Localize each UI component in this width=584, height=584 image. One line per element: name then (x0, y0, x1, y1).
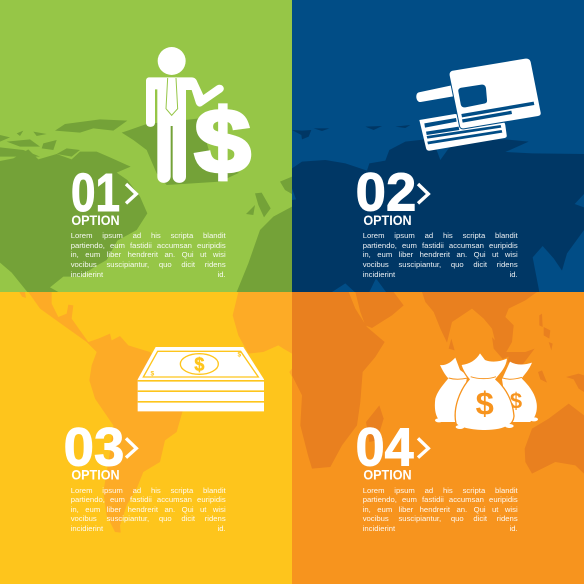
text block 03: incidierint id. (71, 524, 226, 533)
world map: south america (19, 292, 292, 533)
label OPTION: OPTION (71, 466, 120, 482)
icon: stack of banknotes (138, 347, 264, 411)
icon: stack of banknotes: $ (194, 354, 204, 374)
icon: money bags: $ (510, 389, 522, 414)
text block 02: Lorem ipsum ad his scripta blandit (363, 231, 518, 240)
world map: asia (292, 125, 584, 292)
text block 01: in, eum liber hendrerit an. Qui ut wisi (71, 250, 226, 259)
text block 01: vocibus suscipiantur, quo dicit ridens (71, 260, 226, 269)
panel: option 02 (292, 0, 584, 292)
panel: option 04 (292, 292, 584, 584)
text block 03: Lorem ipsum ad his scripta blandit (71, 486, 226, 494)
text block 02 (362, 231, 518, 279)
number 04: 04 (356, 418, 414, 477)
icon: businessman with dollar: $ (195, 92, 251, 193)
text block 04: vocibus suscipiantur, quo dicit ridens (363, 514, 518, 523)
text block 02: in, eum liber hendrerit an. Qui ut wisi (363, 250, 518, 259)
text block 02: vocibus suscipiantur, quo dicit ridens (363, 260, 518, 269)
icon: stack of banknotes: $ (150, 370, 154, 377)
text block 03: vocibus suscipiantur, quo dicit ridens (71, 514, 226, 523)
arrow (418, 184, 428, 203)
text block 01: partiendo, eum fastidii accumsan euripidis (71, 241, 226, 250)
label OPTION: OPTION (363, 212, 412, 228)
text block 02: incidierint id. (363, 270, 518, 279)
text block 01: Lorem ipsum ad his scripta blandit (71, 231, 226, 240)
text block 02: partiendo, eum fastidii accumsan euripidis (363, 241, 518, 250)
icon: cards (416, 59, 541, 151)
text block 01 (70, 231, 226, 279)
text block 03: in, eum liber hendrerit an. Qui ut wisi (71, 505, 226, 514)
icon: money bags: $ (476, 384, 494, 421)
label OPTION: OPTION (71, 212, 120, 228)
arrow (126, 184, 136, 203)
text block 04: partiendo, eum fastidii accumsan euripidis (363, 495, 518, 504)
text block 01: incidierint id. (71, 270, 226, 279)
arrow (418, 438, 428, 458)
world map: north america (0, 118, 292, 292)
arrow (126, 438, 136, 458)
icon: money bags (435, 353, 538, 430)
text block 04 (362, 486, 518, 533)
label OPTION: OPTION (363, 466, 412, 482)
text block 04: Lorem ipsum ad his scripta blandit (363, 486, 518, 494)
number 02: 02 (356, 164, 416, 223)
panel: option 01 (0, 0, 292, 292)
text block 03 (70, 486, 226, 533)
icon: stack of banknotes: $ (237, 352, 241, 359)
text block 04: incidierint id. (363, 524, 518, 533)
number 03: 03 (64, 418, 124, 477)
number 01: 01 (71, 164, 120, 223)
text block 04: in, eum liber hendrerit an. Qui ut wisi (363, 505, 518, 514)
icon: businessman with dollar (146, 47, 251, 193)
panel: option 03 (0, 292, 292, 584)
text block 03: partiendo, eum fastidii accumsan euripidis (71, 495, 226, 504)
world map: africa, asia, australia (292, 292, 584, 474)
